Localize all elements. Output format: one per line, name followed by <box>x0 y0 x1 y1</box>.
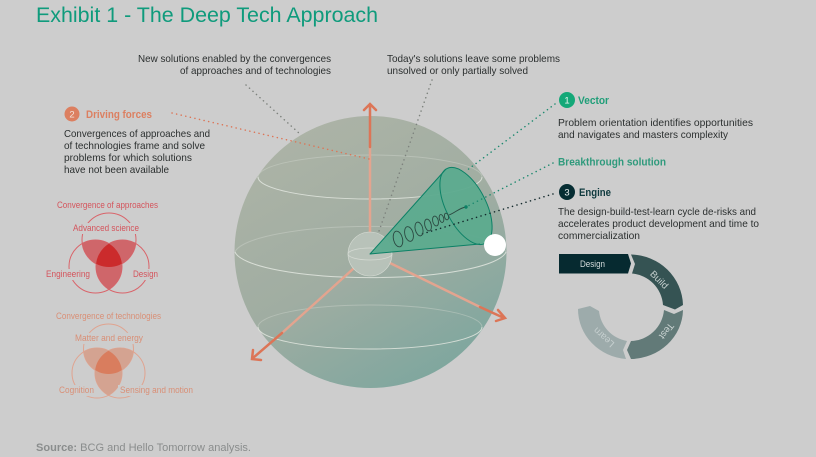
text block: today's solutions: unsolved or only partially solved <box>387 65 528 77</box>
driving forces heading: 2 <box>69 110 75 120</box>
step: test: Test <box>656 320 676 341</box>
sphere <box>234 116 506 388</box>
vector text <box>558 117 753 141</box>
step: build: Build <box>647 269 670 292</box>
venn: convergence of technologies: Sensing and motion <box>120 385 193 395</box>
driving forces text <box>64 128 210 176</box>
leader: new solutions <box>246 85 300 134</box>
driving forces text: of technologies frame and solve <box>64 140 205 152</box>
text block: new solutions: of approaches and of technologies <box>180 65 331 77</box>
engine text <box>558 206 759 242</box>
leader: today's solutions <box>378 80 432 234</box>
title: Exhibit 1 - The Deep Tech Approach <box>36 4 378 27</box>
source note: Source: BCG and Hello Tomorrow analysis. <box>36 442 251 454</box>
small inner sphere <box>348 232 392 276</box>
arrow: lower right <box>390 263 505 321</box>
leader: breakthrough solution <box>466 163 553 207</box>
text block: new solutions: New solutions enabled by the convergences <box>138 53 331 65</box>
text block: new solutions <box>138 53 331 77</box>
arrow: up <box>364 104 376 232</box>
venn: convergence of approaches <box>44 200 160 293</box>
white endpoint circle <box>484 234 506 256</box>
driving forces heading <box>64 106 152 122</box>
leader: driving forces <box>172 113 369 159</box>
spiral <box>392 205 468 248</box>
venn: convergence of technologies: Matter and energy <box>75 333 143 343</box>
engine heading: 3 <box>564 188 570 198</box>
vector heading: Vector <box>578 95 610 107</box>
driving forces text: Convergences of approaches and <box>64 128 210 140</box>
text block: today's solutions: Today's solutions leave some problems <box>387 53 560 65</box>
arrow: lower left <box>252 269 353 360</box>
leader: engine <box>422 194 553 234</box>
leader: vector <box>466 104 555 171</box>
venn: convergence of technologies: Cognition <box>59 385 94 395</box>
engine text: The design-build-test-learn cycle de-risks and <box>558 206 756 218</box>
engine text: accelerates product development and time to <box>558 218 759 230</box>
breakthrough solution label: Breakthrough solution <box>558 156 666 168</box>
venn: convergence of approaches: Engineering <box>46 269 90 279</box>
vector text: and navigates and masters complexity <box>558 129 729 141</box>
vector heading <box>559 92 610 108</box>
venn: convergence of technologies: Convergence of technologies <box>56 311 161 321</box>
step: design: Design <box>580 259 605 269</box>
driving forces text: have not been available <box>64 164 169 176</box>
engine heading: Engine <box>579 187 611 199</box>
engine heading <box>559 184 611 200</box>
vector text: Problem orientation identifies opportunities <box>558 117 753 129</box>
driving forces text: problems for which solutions <box>64 152 192 164</box>
text block: today's solutions <box>387 53 560 77</box>
venn: convergence of approaches: Design <box>133 269 158 279</box>
driving forces heading: Driving forces <box>86 109 152 121</box>
vector heading: 1 <box>564 96 570 106</box>
venn: convergence of technologies <box>56 311 195 398</box>
cone: breakthrough vector <box>370 159 503 254</box>
engine text: commercialization <box>558 230 640 242</box>
venn: convergence of approaches: Convergence of approaches <box>57 200 158 210</box>
cycle diagram <box>559 254 683 359</box>
step: learn: Learn <box>592 325 617 349</box>
venn: convergence of approaches: Advanced science <box>73 223 139 233</box>
